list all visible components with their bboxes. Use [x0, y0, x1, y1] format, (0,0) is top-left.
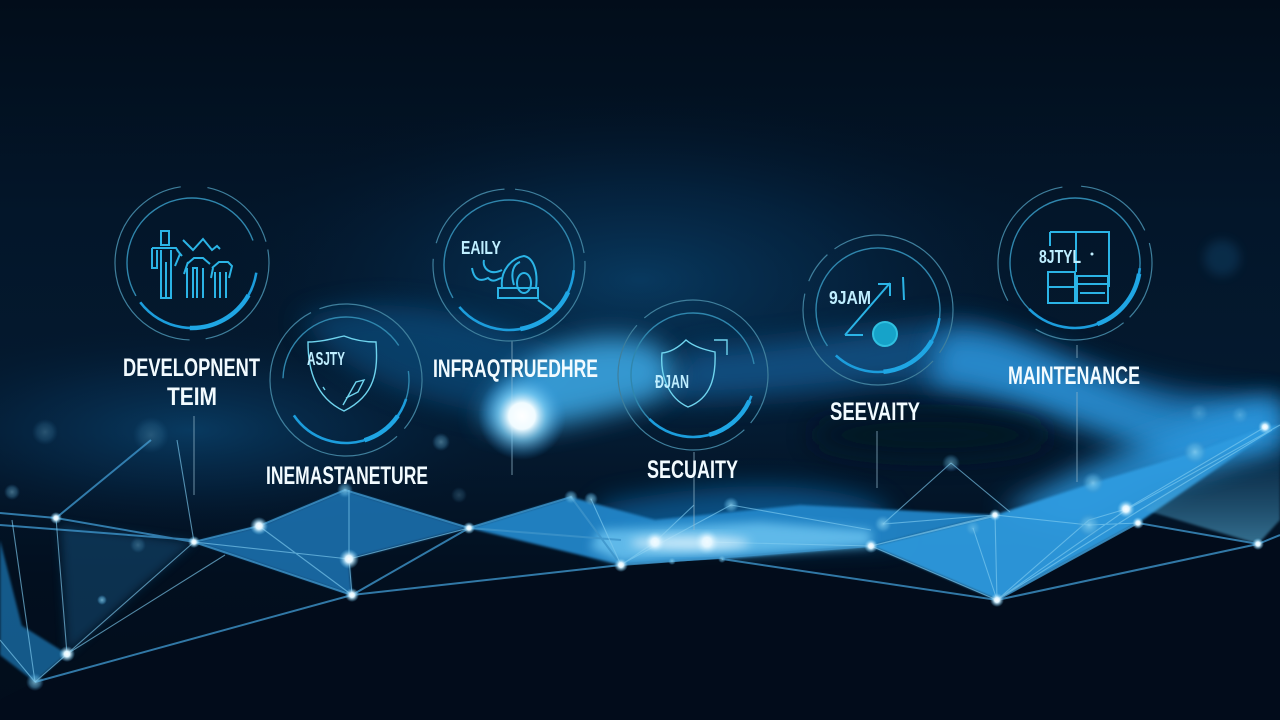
panel: severity — [774, 206, 982, 426]
mesh: dark gap — [0, 523, 1280, 720]
panel: security centre — [587, 269, 799, 484]
rings — [101, 172, 283, 354]
rings — [587, 269, 799, 481]
panel: maintenance — [983, 171, 1167, 390]
mesh: bottom-left facets — [0, 540, 67, 682]
icon: camera machine — [461, 238, 552, 310]
mesh: far-right fan — [1145, 430, 1280, 544]
rings — [249, 283, 443, 477]
mesh: centre-left diamond — [194, 490, 469, 595]
mesh: left fan — [60, 525, 194, 654]
icon: shield with bracket — [655, 340, 727, 407]
panel: infrastructure top — [420, 176, 598, 383]
mesh lines — [0, 425, 1280, 682]
rings — [983, 171, 1167, 355]
label: DEVELOPNENT — [123, 354, 260, 382]
rings — [420, 176, 598, 354]
mesh: right bright wing — [871, 425, 1280, 600]
label second line: TEIM — [167, 383, 217, 411]
icon text: ASJTY — [307, 349, 345, 369]
icon text: 8JTYL — [1039, 247, 1081, 267]
panel: infrastructure left — [249, 283, 443, 490]
network mesh — [0, 425, 1280, 720]
mesh: centre ribbon — [469, 497, 995, 565]
central glow — [478, 372, 566, 460]
label: SEEVAITY — [830, 398, 920, 426]
blue haze and light waves — [0, 90, 1280, 550]
network nodes — [4, 240, 1272, 691]
panel: development team — [101, 172, 283, 411]
label: SECUAITY — [647, 456, 738, 484]
rings — [774, 206, 982, 414]
label: INFRAQTRUEDHRE — [433, 355, 598, 383]
icon text: ĐJAN — [655, 372, 689, 392]
icon: team figures — [152, 231, 232, 298]
connector lines — [194, 341, 1077, 530]
label: INEMASTANETURE — [266, 462, 428, 490]
icon: server panels — [1039, 232, 1109, 303]
label: MAINTENANCE — [1008, 362, 1140, 390]
icon: shield — [307, 336, 377, 411]
icon: arrow and gear — [829, 277, 904, 346]
icon text: EAILY — [461, 238, 501, 258]
mesh: ribbon highlight — [590, 522, 871, 562]
icon text: 9JAM — [829, 288, 871, 308]
bright ribbon flare — [630, 536, 750, 550]
